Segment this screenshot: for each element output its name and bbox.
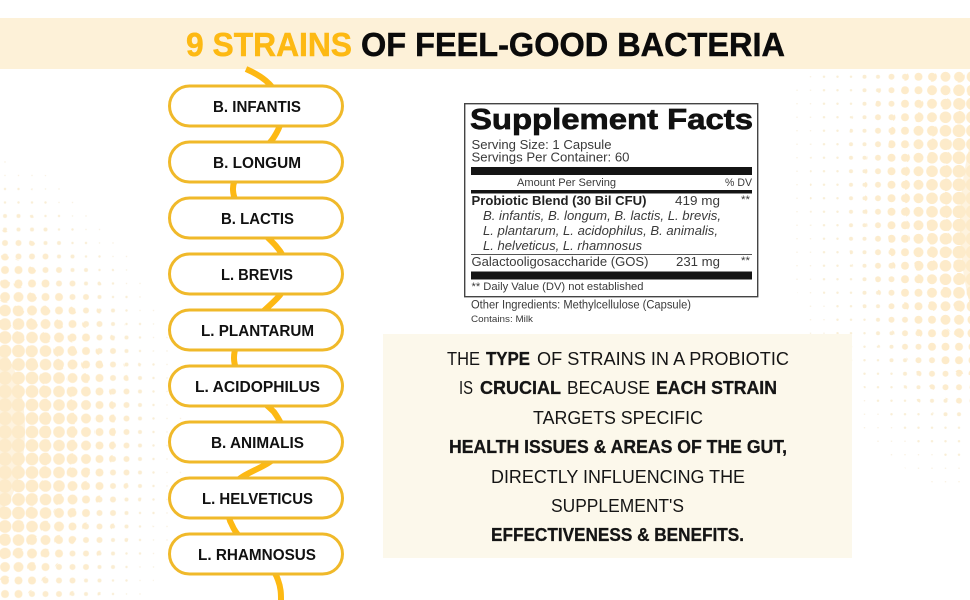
strain: L. helveticus: L. HELVETICUS <box>202 491 313 508</box>
other ingredients: Other Ingredients: Methylcellulose (Capsule) <box>471 300 691 312</box>
strain: L. brevis <box>170 254 342 294</box>
column headers <box>517 177 753 189</box>
callout panel <box>383 334 852 558</box>
title text: OF FEEL-GOOD BACTERIA <box>361 27 785 64</box>
callout text: THE <box>447 348 480 369</box>
GOS row <box>472 254 751 269</box>
strain list <box>170 86 342 574</box>
helix strand <box>228 69 288 600</box>
strain: B. infantis <box>170 86 342 126</box>
GOS row: ** <box>741 255 751 267</box>
serving info <box>472 137 630 164</box>
strain names: B. infantis, B. longum, B. lactis, L. brevis, <box>483 208 721 223</box>
probiotic blend row: Probiotic Blend (30 Bil CFU) <box>472 193 646 208</box>
strain: L. rhamnosus <box>170 534 342 574</box>
halftone dots: right <box>785 69 970 490</box>
callout text: TYPE <box>486 349 530 369</box>
callout text: EACH STRAIN <box>656 378 777 398</box>
callout text <box>447 348 789 545</box>
column headers: % DV <box>725 177 753 189</box>
callout text: HEALTH ISSUES & AREAS OF THE GUT, <box>449 437 787 457</box>
callout text: BECAUSE <box>567 377 650 398</box>
callout text: CRUCIAL <box>480 378 561 398</box>
callout text: OF STRAINS IN A PROBIOTIC <box>537 348 789 369</box>
strain: B. infantis: B. INFANTIS <box>213 99 301 116</box>
callout text: SUPPLEMENT'S <box>551 495 684 516</box>
strain: B. longum <box>170 142 342 182</box>
strain: B. lactis: B. LACTIS <box>221 211 294 228</box>
strain: L. brevis: L. BREVIS <box>221 267 293 284</box>
strain names: L. plantarum, L. acidophilus, B. animalis, <box>483 223 718 238</box>
strain: L. helveticus <box>170 478 342 518</box>
halftone dots: left <box>0 160 185 600</box>
strain: L. acidophilus: L. ACIDOPHILUS <box>195 379 320 396</box>
strain: B. animalis <box>170 422 342 462</box>
title banner <box>0 18 970 69</box>
probiotic blend row: ** <box>741 194 751 206</box>
serving info: Serving Size: 1 Capsule <box>472 137 612 152</box>
column headers: Amount Per Serving <box>517 177 616 189</box>
strain: L. rhamnosus: L. RHAMNOSUS <box>198 547 316 564</box>
GOS row: Galactooligosaccharide (GOS) <box>472 254 648 269</box>
strain: L. plantarum: L. PLANTARUM <box>201 323 314 340</box>
strain names <box>483 208 721 253</box>
daily value note: ** Daily Value (DV) not established <box>472 281 644 293</box>
strain: B. longum: B. LONGUM <box>213 155 301 172</box>
callout text: IS <box>459 377 473 398</box>
allergen note: Contains: Milk <box>471 314 533 325</box>
supplement facts panel <box>465 104 758 297</box>
GOS row: 231 mg <box>676 254 720 269</box>
strain: L. plantarum <box>170 310 342 350</box>
serving info: Servings Per Container: 60 <box>472 150 630 164</box>
strain: L. acidophilus <box>170 366 342 406</box>
panel heading: Supplement Facts <box>470 104 753 136</box>
callout text: EFFECTIVENESS & BENEFITS. <box>491 525 744 545</box>
strain: B. animalis: B. ANIMALIS <box>211 435 304 452</box>
callout text: TARGETS SPECIFIC <box>533 407 703 428</box>
probiotic blend row <box>472 193 751 208</box>
callout text: DIRECTLY INFLUENCING THE <box>491 466 745 487</box>
strain: B. lactis <box>170 198 342 238</box>
probiotic blend row: 419 mg <box>675 193 720 208</box>
title highlight: 9 STRAINS <box>186 27 352 64</box>
strain names: L. helveticus, L. rhamnosus <box>483 238 642 253</box>
